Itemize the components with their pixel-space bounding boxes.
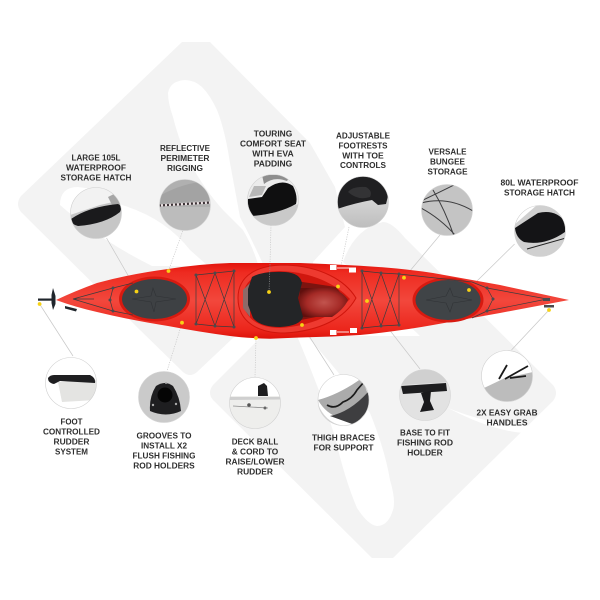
callout: versatile bungee storage — [421, 146, 473, 236]
callout: foot rudder: SYSTEM — [55, 446, 88, 456]
callout: rod holder base: HOLDER — [407, 448, 444, 458]
icon: hatch photo — [70, 187, 122, 239]
icon: rigging photo — [159, 179, 211, 231]
deck rigging — [73, 271, 547, 328]
white deck labels — [330, 265, 357, 335]
callout: touring seat: TOURING — [254, 128, 293, 138]
callout: perimeter rigging: RIGGING — [167, 163, 203, 173]
callout: 80L hatch: STORAGE HATCH — [504, 188, 575, 198]
yellow marker dots — [38, 269, 551, 340]
left hatch — [119, 276, 190, 322]
callout: touring seat: PADDING — [254, 158, 293, 168]
icon: rod base photo — [399, 369, 451, 421]
callout: thigh braces — [312, 374, 375, 452]
icon: thigh brace photo — [318, 374, 370, 426]
cockpit — [238, 265, 356, 333]
deck fittings — [108, 270, 554, 330]
background paddle logo — [18, 42, 556, 558]
callout: thigh braces: THIGH BRACES — [312, 432, 375, 442]
callout: versatile bungee storage: STORAGE — [428, 166, 468, 176]
callout: 80L hatch — [500, 178, 578, 257]
callout: deck ball and cord: RAISE/LOWER — [226, 456, 285, 466]
callout: rod holder grooves: GROOVES TO — [136, 430, 192, 440]
callout: perimeter rigging — [159, 143, 211, 231]
icon: handle photo — [481, 350, 533, 402]
callout: adjustable footrests: FOOTRESTS — [338, 140, 388, 150]
callout: large 105L hatch: LARGE 105L — [72, 152, 120, 162]
icon: bungee photo — [421, 184, 473, 236]
callout: adjustable footrests — [336, 130, 390, 228]
callout: adjustable footrests: CONTROLS — [340, 160, 386, 170]
callout: rod holder grooves — [132, 371, 196, 470]
icon: seat photo — [247, 174, 299, 226]
callout: foot rudder: CONTROLLED — [43, 426, 100, 436]
icon: rudder photo — [48, 375, 96, 402]
callout: deck ball and cord — [226, 377, 285, 476]
callout: adjustable footrests: WITH TOE — [342, 150, 384, 160]
icon: footrest photo — [337, 176, 389, 228]
callout: thigh braces: FOR SUPPORT — [314, 442, 374, 452]
callout: touring seat: COMFORT SEAT — [240, 138, 307, 148]
callout: grab handles: 2X EASY GRAB — [476, 408, 538, 418]
seat connector overlay — [269, 264, 270, 292]
callout: deck ball and cord: RUDDER — [237, 466, 274, 476]
callout: deck ball and cord: DECK BALL — [232, 436, 278, 446]
connector lines — [40, 225, 549, 377]
icon: hatch photo — [514, 205, 566, 257]
callout: grab handles: HANDLES — [486, 418, 528, 428]
callout: 80L hatch: 80L WATERPROOF — [500, 178, 578, 188]
callout: touring seat: WITH EVA — [252, 148, 294, 158]
rudder — [38, 288, 77, 312]
callout: large 105L hatch: WATERPROOF — [66, 162, 126, 172]
callout: perimeter rigging: REFLECTIVE — [160, 143, 210, 153]
callout: perimeter rigging: PERIMETER — [160, 153, 210, 163]
callout: rod holder grooves: FLUSH FISHING — [132, 450, 196, 460]
callout: foot rudder: RUDDER — [54, 436, 90, 446]
right hatch — [412, 278, 484, 322]
callout: foot rudder — [43, 357, 100, 456]
callout: rod holder grooves: ROD HOLDERS — [133, 460, 195, 470]
callout: rod holder base: BASE TO FIT — [400, 428, 451, 438]
kayak — [38, 263, 569, 339]
callout: rod holder grooves: INSTALL X2 — [141, 440, 187, 450]
callout: rod holder base — [397, 369, 453, 458]
callout: foot rudder: FOOT — [60, 416, 83, 426]
callout: touring seat — [240, 128, 307, 226]
icon: rod holder photo — [138, 371, 190, 423]
callout: versatile bungee storage: VERSALE — [428, 146, 467, 156]
callout: large 105L hatch — [60, 152, 132, 239]
callout: deck ball and cord: & CORD TO — [232, 446, 279, 456]
callout: large 105L hatch: STORAGE HATCH — [60, 172, 132, 182]
icon: deck ball photo — [230, 378, 280, 410]
callout: versatile bungee storage: BUNGEE — [430, 156, 465, 166]
hull — [56, 263, 569, 339]
callout: adjustable footrests: ADJUSTABLE — [336, 130, 390, 140]
callout: grab handles — [476, 350, 538, 428]
callout: rod holder base: FISHING ROD — [397, 438, 453, 448]
